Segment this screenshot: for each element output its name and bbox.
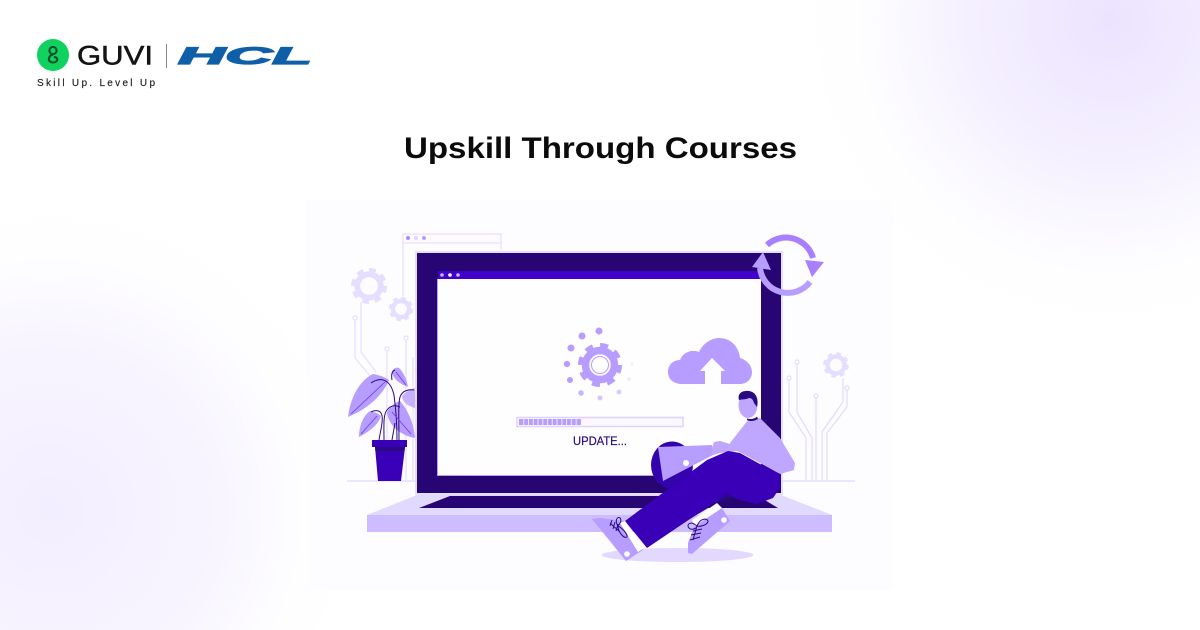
- title: Upskill Through Courses: [404, 132, 797, 165]
- leaves: [348, 368, 415, 438]
- icon: small gear right: [824, 354, 848, 376]
- progress bar: [517, 418, 683, 426]
- dark seat blob: [651, 442, 693, 488]
- front leg: [625, 451, 780, 548]
- laptop base: [367, 495, 832, 532]
- rear shoe: [688, 503, 730, 554]
- icon: cloud upload: [668, 338, 752, 384]
- browser window outline: [403, 234, 501, 296]
- shadow: [602, 548, 754, 562]
- front shoe: [592, 517, 644, 561]
- icon: refresh arrows: [752, 238, 824, 293]
- hand and arm: [712, 441, 761, 460]
- laptop on knee: [658, 445, 713, 481]
- logo: GUVI and HCL: [37, 39, 312, 89]
- window dots: [440, 273, 444, 277]
- laptop screen frame: [415, 251, 783, 495]
- torso: [730, 418, 795, 474]
- plant: [348, 368, 415, 481]
- ground line: [347, 480, 855, 482]
- stems and veins: [371, 370, 414, 440]
- pot: [372, 440, 407, 481]
- circuit lines left and window: [353, 234, 501, 480]
- icon: large gear: [353, 270, 385, 302]
- icon: GUVI green circle: [37, 39, 69, 71]
- tagline: Skill Up. Level Up: [37, 78, 155, 89]
- icon: small gear left: [390, 298, 412, 320]
- head: [738, 391, 758, 421]
- circuit lines right: [787, 360, 849, 480]
- person with laptop: [592, 391, 795, 562]
- illustration panel: [306, 200, 893, 590]
- icon: central gear with dots: [564, 328, 634, 400]
- update label: UPDATE...: [573, 434, 627, 448]
- GUVI wordmark: GUVI: [77, 40, 153, 70]
- rear leg: [688, 492, 736, 520]
- HCL wordmark: HCL: [178, 43, 312, 70]
